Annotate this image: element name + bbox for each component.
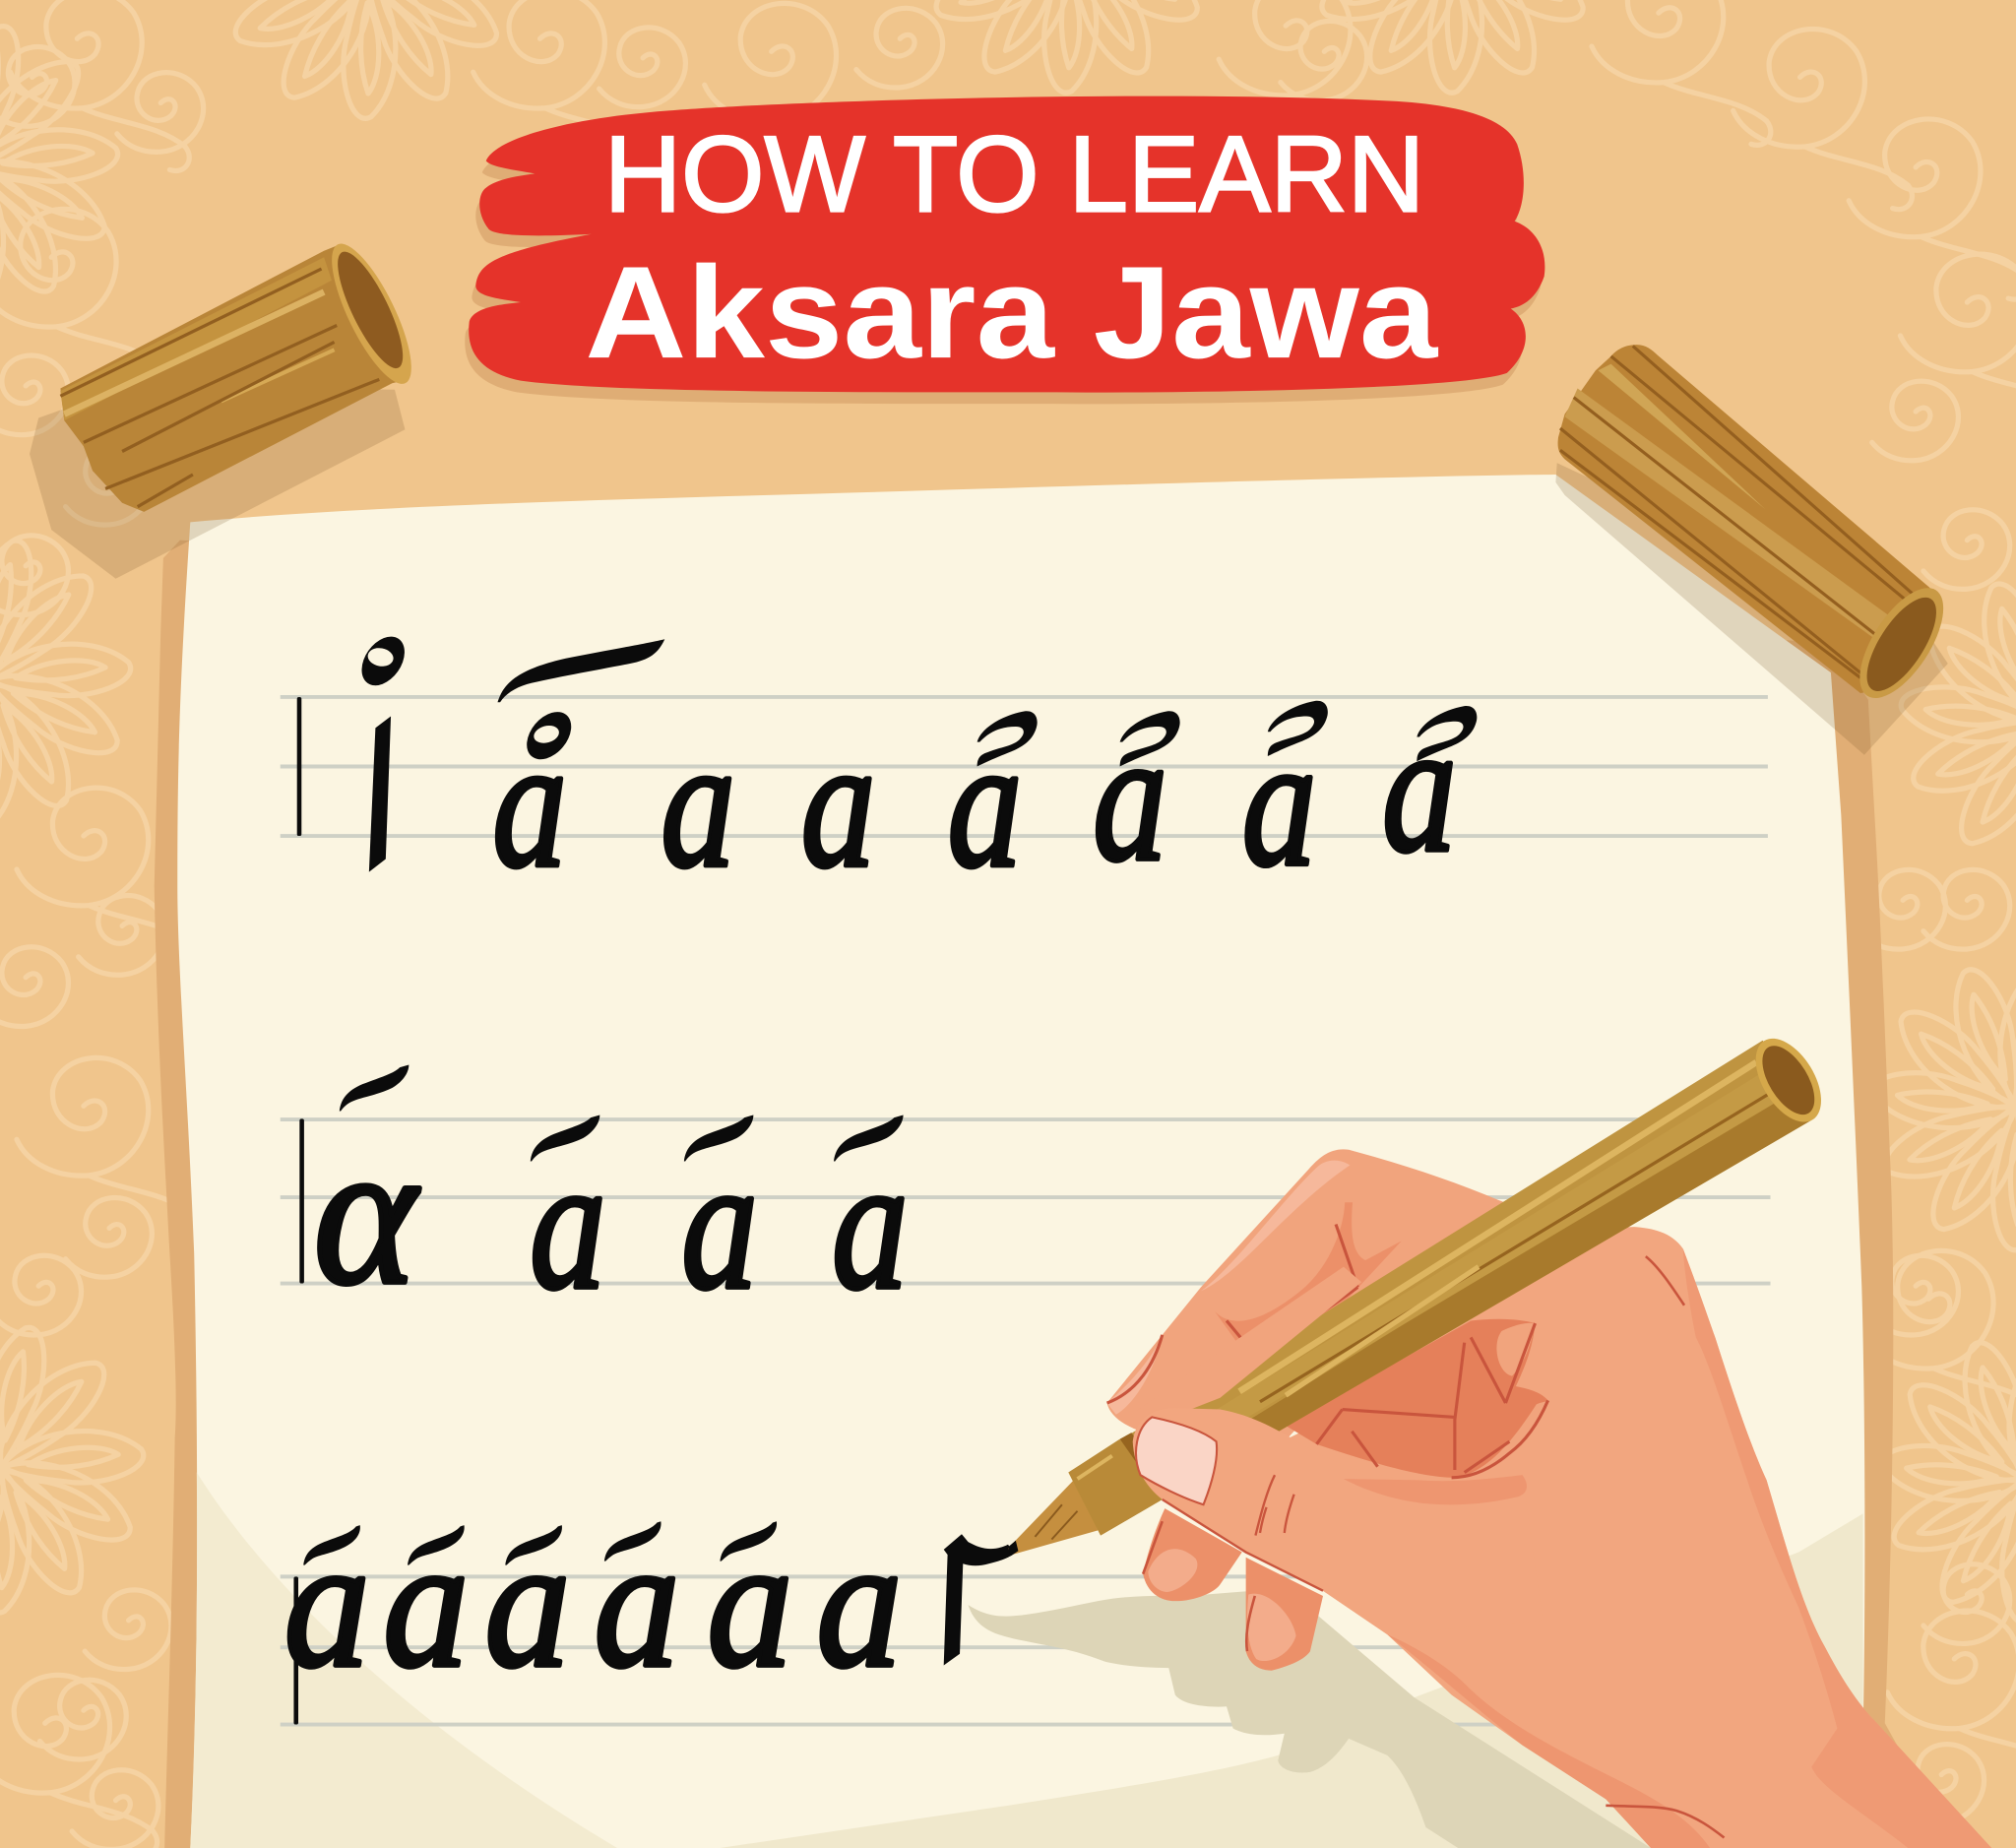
letters: a bbox=[492, 700, 567, 907]
top strokes bbox=[303, 1521, 777, 1565]
guide bar bbox=[299, 1118, 304, 1284]
ring finger bbox=[1246, 1558, 1323, 1671]
ring mark bbox=[518, 703, 580, 768]
letters: α bbox=[314, 1101, 420, 1327]
icon: writing hand with reed pen bbox=[1008, 1027, 1991, 1848]
title banner bbox=[465, 96, 1544, 404]
stroke in progress bbox=[944, 1534, 1015, 1665]
row 1 of script practice: a bbox=[1382, 685, 1457, 891]
row 1 of script practice: a bbox=[801, 700, 875, 907]
panel: paper back shadow band bbox=[155, 541, 1954, 1848]
row 1 of script practice bbox=[297, 628, 1477, 907]
row 3 of script practice: a bbox=[707, 1500, 792, 1706]
top strokes bbox=[340, 1065, 904, 1161]
title line 2: Aksara Jawa bbox=[585, 239, 1438, 386]
index finger overlap on pen bbox=[1131, 1267, 1361, 1430]
thumbnail bbox=[1136, 1417, 1217, 1504]
guide bar bbox=[293, 1576, 298, 1725]
pen end opening bbox=[1742, 1027, 1835, 1133]
icon: right reed tube bbox=[1558, 345, 1960, 711]
letters: a bbox=[284, 1500, 370, 1706]
long top stroke bbox=[497, 639, 664, 702]
shaded corner bottom left bbox=[190, 1473, 617, 1848]
row 2 of script practice bbox=[299, 1065, 909, 1328]
reed pen bbox=[1008, 1027, 1835, 1556]
banner shadow bbox=[465, 107, 1541, 404]
row 1 of script practice: a bbox=[1242, 699, 1316, 906]
title line 1: HOW TO LEARN bbox=[604, 114, 1424, 234]
row 3 of script practice: a bbox=[383, 1500, 469, 1706]
stem with ring bbox=[353, 628, 413, 872]
pen ferrule bbox=[1068, 1439, 1163, 1536]
panel: paper sheet bbox=[177, 475, 1864, 1848]
squiggle marks bbox=[977, 701, 1477, 766]
index finger bbox=[1107, 1149, 1504, 1440]
guide bar bbox=[297, 697, 301, 836]
back of hand bbox=[1163, 1227, 1991, 1848]
row 3 of script practice: a bbox=[594, 1500, 680, 1706]
row 2 of script practice: a bbox=[681, 1118, 758, 1328]
hand darker edges bbox=[1683, 1248, 1991, 1848]
row 3 of script practice: a bbox=[484, 1500, 571, 1706]
row 2 of script practice: a bbox=[530, 1118, 606, 1328]
banner red blob bbox=[469, 96, 1544, 393]
row 1 of script practice: a bbox=[948, 700, 1022, 907]
palm hollow bbox=[1285, 1319, 1548, 1478]
row 3 of script practice: a bbox=[816, 1500, 903, 1706]
row 1 of script practice: a bbox=[661, 700, 735, 907]
middle finger bbox=[1143, 1508, 1242, 1601]
shaded corner bottom right bbox=[720, 1513, 1863, 1848]
icon: left reed tube bbox=[60, 234, 426, 512]
row 3 of script practice bbox=[284, 1500, 1015, 1725]
row 2 of script practice: a bbox=[832, 1118, 909, 1328]
ruled lines bbox=[281, 697, 1771, 1725]
thumb bbox=[1133, 1408, 1543, 1634]
hand shadow on paper bbox=[969, 1588, 1651, 1848]
row 1 of script practice: a bbox=[1093, 694, 1167, 901]
pen brush tip bbox=[1008, 1479, 1098, 1555]
tube shadows bbox=[30, 386, 1948, 755]
pen body bbox=[1068, 1041, 1811, 1536]
